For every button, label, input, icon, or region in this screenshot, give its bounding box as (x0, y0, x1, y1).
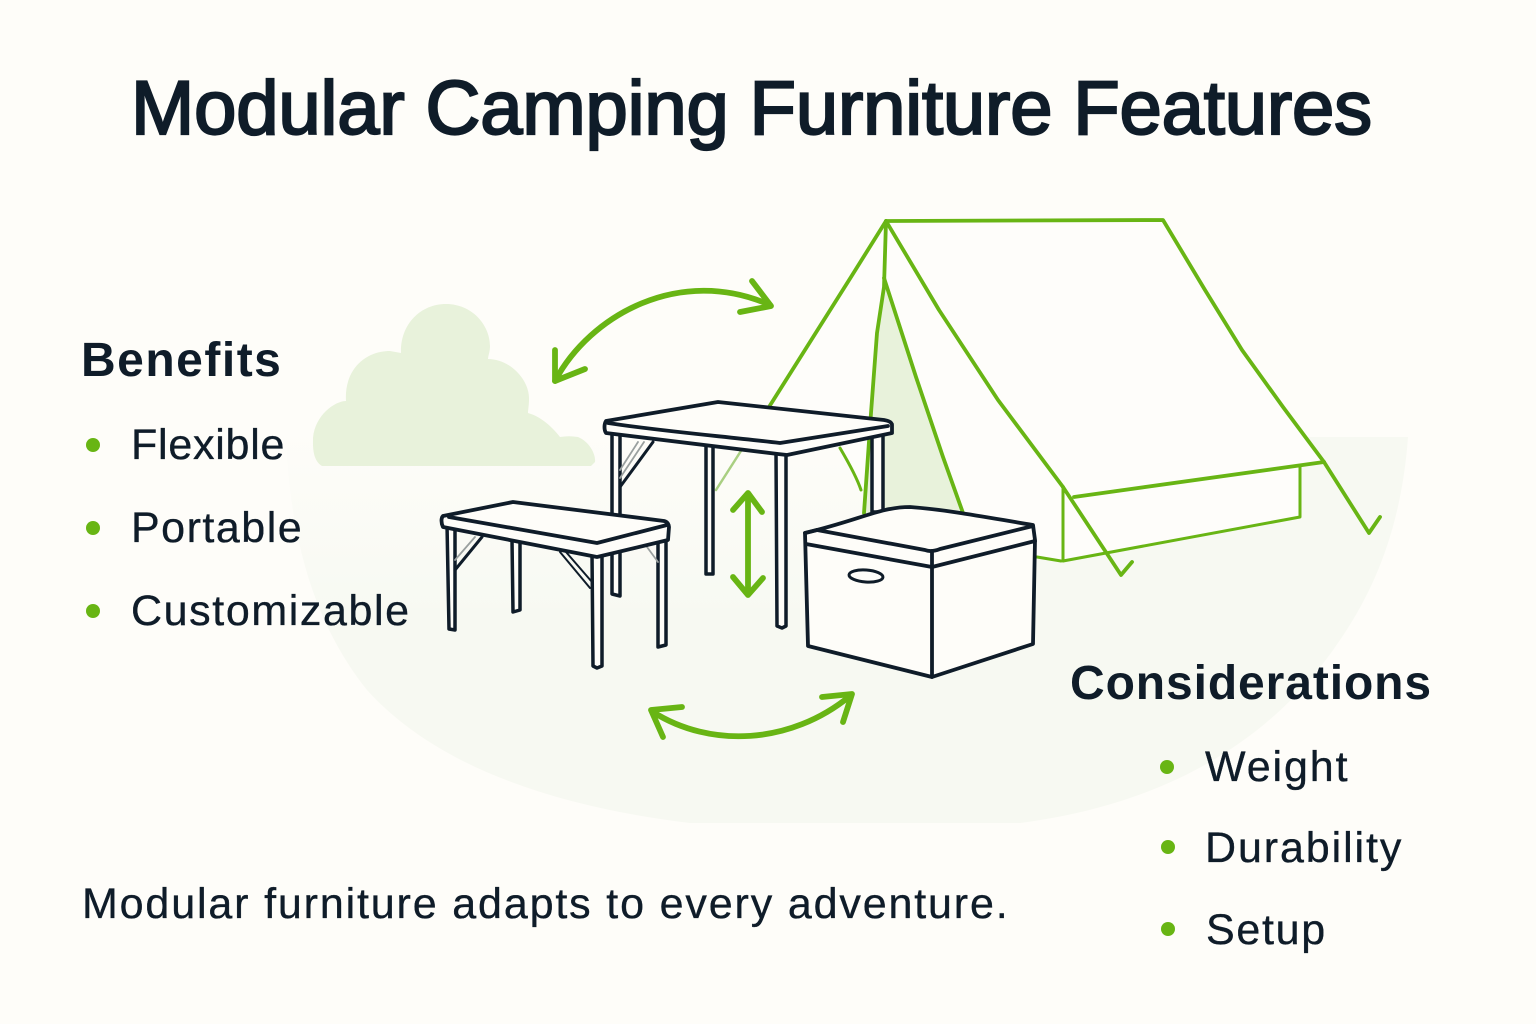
benefit: Customizable: Customizable (131, 587, 411, 635)
benefit: Flexible: Flexible (131, 421, 285, 469)
Considerations bullets (1160, 760, 1175, 936)
arrow: top curved double (555, 281, 771, 381)
consideration: Durability: Durability (1205, 824, 1403, 872)
title: Modular Camping Furniture Features (131, 66, 1372, 151)
consideration: Setup: Setup (1206, 906, 1327, 954)
benefit: Portable: Portable (131, 504, 303, 552)
ground blob (280, 430, 1408, 823)
tent (716, 220, 1380, 575)
small folding bench (442, 502, 669, 668)
heading: Considerations: Considerations (1070, 657, 1432, 710)
arrow: vertical double (733, 493, 763, 595)
heading: Benefits: Benefits (81, 334, 282, 387)
tagline: Modular furniture adapts to every adventure. (82, 880, 1010, 928)
consideration: Weight: Weight (1205, 743, 1349, 791)
Benefits bullets (86, 438, 100, 618)
large folding table (604, 402, 892, 628)
cloud (313, 304, 595, 466)
storage box (805, 507, 1035, 677)
arrow: bottom curved double (651, 694, 852, 737)
